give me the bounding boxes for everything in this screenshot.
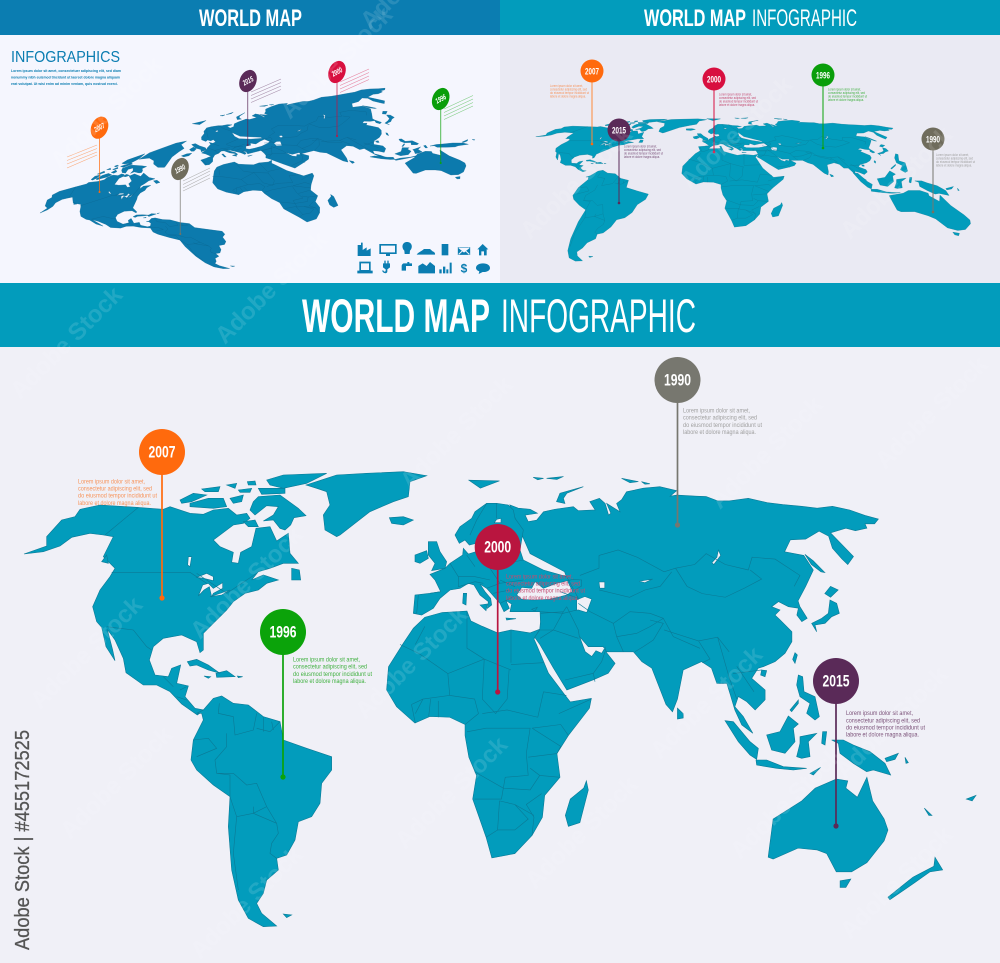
text: 1996 note: consectetur adipiscing elit, sed [293,664,367,671]
watermark: repeated stock text: Adobe Stock [835,121,958,244]
text: 2015 note: labore et dolore magna aliqua. [846,732,919,739]
pin: 1996 small: 1996 [816,70,830,82]
text: 2015 note: consectetur adipiscing elit, sed [846,717,920,724]
vertical stock id: Adobe Stock | #455172525 [12,730,34,950]
panel: main world map [0,284,1000,963]
pin: 1996 small [812,64,867,149]
pin: 2007 small: 2007 [585,66,599,78]
watermark: repeated stock text: Adobe Stock [350,601,473,724]
header: world map: WORLD MAP [199,5,302,32]
continent: north america [24,472,427,715]
pin: 2000 isometric: 2000 [329,65,344,79]
text: 2000 note: Lorem ipsum dolor sit amet, [506,574,573,580]
title banner [0,284,1000,347]
watermark: repeated stock text: Adobe Stock [390,731,513,854]
pin: 2000 small [702,68,758,153]
pin: 2000 small: do eiusmod tempor incididunt ut [719,100,758,104]
watermark: repeated stock text: Adobe Stock [645,641,768,764]
text: 1996 note: labore et dolore magna aliqua. [293,678,366,685]
continent: australia [768,777,888,887]
pin: 1996 small: Lorem ipsum dolor sit amet, [828,88,861,92]
pin: 1996 small: labore et dolore magna aliqua. [828,98,864,102]
icon: factory [358,243,371,256]
pin: 2015 small: labore et dolore magna aliqua. [624,155,660,159]
pin: 2000 small: consectetur adipiscing elit, sed [719,96,756,100]
watermark: repeated stock text: Adobe Stock [835,821,958,944]
watermark: repeated stock text: Adobe Stock [55,721,178,844]
watermark: repeated stock text: Adobe Stock [395,371,518,494]
heading: infographics: INFOGRAPHICS [11,49,120,66]
icon: house [477,244,488,255]
watermark: repeated stock text: Adobe Stock [45,51,168,174]
panel: left world map [0,0,500,284]
icon: light bulb [402,242,412,254]
pin: 1996 isometric [429,85,473,164]
text: 2007 note [78,478,157,507]
icon: dollar: $ [461,262,468,276]
continent: eurasia [413,477,878,733]
text block: intro: nonummy nibh euismod tincidunt ut laoreet dolore magna aliquam [11,76,121,80]
text: 2007 note: labore et dolore magna aliqua. [78,500,151,507]
pin: 2015: 2015 [822,672,850,690]
map: isometric world [20,77,481,269]
watermark: repeated stock text: Adobe Stock [675,71,798,194]
pin: 1990 small: labore et dolore magna aliqua. [936,164,972,168]
pin: 2007 small: consectetur adipiscing elit, sed [550,88,587,92]
header: world map infographic: INFOGRAPHIC [752,5,857,32]
watermark: repeated stock text: Adobe Stock [830,661,953,784]
title banner: WORLD MAP [302,289,490,342]
pin: 2007 isometric [67,114,112,193]
panel: right world map [500,0,1000,284]
text block: intro: Lorem ipsum dolor sit amet, consectetuer adipiscing elit, sed diam [11,69,122,73]
pin: 2007 small: Lorem ipsum dolor sit amet, [550,84,583,88]
text: 2007 note: Lorem ipsum dolor sit amet, [78,478,145,486]
text: 1990 note [683,408,762,436]
pin: 1990 small: 1990 [926,134,940,146]
text: 2007 note: consectetur adipiscing elit, sed [78,486,152,492]
watermark: repeated stock text: Adobe Stock [520,771,643,894]
text: 2000 note: labore et dolore magna aliqua. [506,595,579,602]
text block: intro [11,69,122,86]
pin: 2015 [813,658,925,829]
text: 1990 note: Lorem ipsum dolor sit amet, [683,408,750,414]
pin: 2000 small: labore et dolore magna aliqua. [719,103,755,107]
text: 2000 note: consectetur adipiscing elit, sed [506,580,580,588]
icon set [357,242,490,276]
map: flat world small [514,118,987,261]
text: 1996 note: do eiusmod tempor incididunt ut [293,671,372,678]
icon: houses [418,262,435,273]
watermark: repeated stock text: Adobe Stock [185,521,308,644]
pin: 2007 small [550,60,604,145]
icon: fuel pump [442,244,448,255]
pin: 2000 [475,524,585,695]
icon: laptop [357,262,373,273]
divider line under top panels [0,283,1000,284]
pin: 2007 small: do eiusmod tempor incididunt ut [550,91,589,95]
text: 1996 note [293,656,372,685]
icon: plug [382,261,390,273]
pin: 1996 isometric: 1996 [434,92,448,106]
pin: 2000 small: 2000 [707,74,721,86]
header: world map infographic: WORLD MAP [644,5,746,32]
pin: 1996 small: consectetur adipiscing elit, sed [828,91,865,95]
continent: africa [387,611,591,858]
continent: south america [191,696,332,927]
watermark: repeated stock text: Adobe Stock [5,281,128,404]
pin: 2000 isometric [325,58,369,137]
pin: 1990 small: consectetur adipiscing elit, sed [936,156,973,160]
text: 1996 note: Lorem ipsum dolor sit amet, [293,656,360,664]
pin: 1996: 1996 [270,624,296,642]
islands: new zealand [888,795,976,900]
pin: 2007 isometric: 2007 [92,121,107,134]
pin: 1990 small [922,128,975,213]
pin: 1990 small: do eiusmod tempor incididunt ut [936,160,975,164]
pin: 1990 [654,357,762,528]
text block: intro: erat volutpat. Ut wisi enim ad minim veniam, quis nostrud exerci. [11,82,118,86]
pin: 2007 small: labore et dolore magna aliqua. [550,94,586,98]
pin: 1996 small: do eiusmod tempor incididunt ut [828,94,867,98]
icon: car [417,249,435,255]
pin: 2000 small: Lorem ipsum dolor sit amet, [719,92,752,96]
pin: 2015 small: do eiusmod tempor incididunt ut [624,152,663,156]
watermark: repeated stock text: Adobe Stock [705,391,828,514]
map: flat world large [24,472,976,927]
pin: 2007: 2007 [148,444,176,462]
icon: chat [476,263,490,274]
icon: monitor [379,244,397,256]
text: 1990 note: labore et dolore magna aliqua. [683,429,756,436]
pin: 2015 small: consectetur adipiscing elit, sed [624,148,661,152]
pin: 1990 isometric: 1990 [173,162,187,176]
watermark: repeated stock text: Adobe Stock [725,741,848,864]
islands: south east asia [725,675,908,775]
pin: 1990 isometric [168,155,210,235]
pin: 2015 small: 2015 [612,126,626,136]
icon: mail [457,247,471,255]
watermark: repeated stock text: Adobe Stock [25,591,148,714]
pin: 2000: 2000 [484,538,511,556]
icon: bar chart [439,263,452,273]
header: world map [0,0,500,35]
icon: tap [402,262,412,271]
text: 2015 note: do eiusmod tempor incididunt ut [846,724,925,732]
text: 2000 note [506,574,585,602]
watermark: repeated stock text: Adobe Stock [185,841,308,963]
title banner: INFOGRAPHIC [501,289,696,342]
text: 2007 note: do eiusmod tempor incididunt ut [78,493,157,500]
pin: 1990: 1990 [664,372,691,390]
watermark: repeated stock text: Adobe Stock [210,226,333,349]
pin: 2015 isometric: 2015 [240,74,255,88]
text: 1990 note: do eiusmod tempor incididunt ut [683,422,762,429]
pin: 2015 small [608,118,663,204]
pin: 1996 [260,609,372,780]
watermark: repeated stock text: Adobe Stock [870,351,993,474]
header: world map infographic [500,0,1000,35]
pin: 2015 isometric [236,67,281,146]
watermark: repeated stock text: Adobe Stock [515,121,638,244]
text: 2000 note: do eiusmod tempor incididunt ut [506,588,585,595]
pin: 2015 small: Lorem ipsum dolor sit amet, [624,144,657,148]
text: 1990 note: consectetur adipiscing elit, sed [683,415,757,422]
text: 2015 note: Lorem ipsum dolor sit amet, [846,710,913,717]
pin: 1990 small: Lorem ipsum dolor sit amet, [936,153,969,157]
text: 2015 note [846,710,925,739]
watermark: repeated stock text: Adobe Stock [275,1,398,124]
pin: 2007 [78,429,185,601]
